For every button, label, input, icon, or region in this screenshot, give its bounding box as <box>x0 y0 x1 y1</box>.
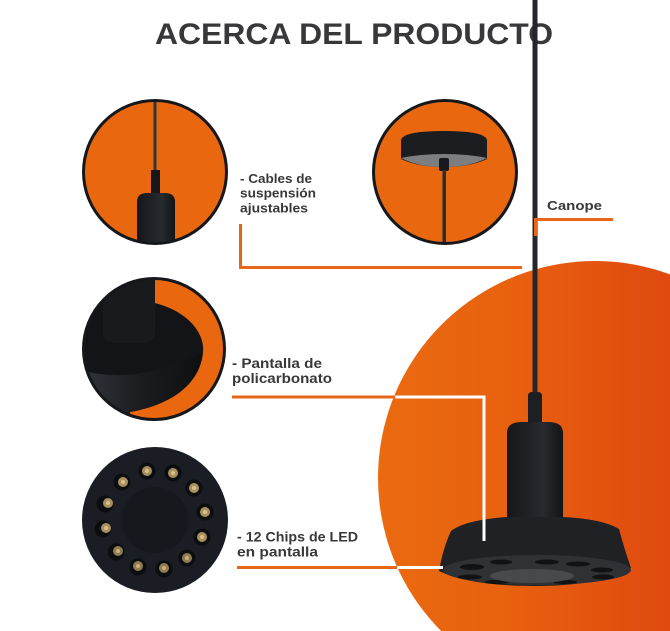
label: suspension cables: suspensión <box>240 186 316 200</box>
label: polycarbonate shade: - Pantalla de <box>232 356 323 371</box>
panel: suspension cables detail <box>84 99 226 245</box>
lamp underside with LED holes <box>443 555 631 585</box>
canopy fitting <box>439 158 449 171</box>
title: ACERCA DEL PRODUCTO <box>155 18 553 51</box>
lamp cylinder body <box>507 422 563 520</box>
large orange background circle <box>378 261 670 631</box>
label: LED chips: en pantalla <box>237 544 319 560</box>
label: LED chips: - 12 Chips de LED <box>237 530 358 544</box>
panel: canopy detail <box>374 100 516 245</box>
leader line: LED chips, white part <box>397 566 443 569</box>
leader line: polycarbonate shade, orange part <box>232 396 395 398</box>
lamp shade <box>439 517 631 586</box>
label: suspension cables: - Cables de <box>240 172 312 186</box>
leader line: polycarbonate shade, white part <box>395 397 484 541</box>
panel: polycarbonate shade detail <box>82 277 226 421</box>
cable neck <box>151 170 160 195</box>
label: polycarbonate shade: policarbonato <box>232 371 332 386</box>
leader line: canope <box>536 220 613 236</box>
label: polycarbonate shade <box>232 356 332 386</box>
cord <box>442 170 446 245</box>
lamp cord <box>532 0 538 394</box>
pendant lamp product <box>439 0 631 586</box>
canopy disc <box>401 131 487 167</box>
panel: LED chips detail <box>82 447 228 593</box>
canopy underside <box>401 154 487 167</box>
leader line: LED chips, orange part <box>237 566 397 569</box>
label: suspension cables <box>240 172 316 216</box>
label: suspension cables: ajustables <box>240 202 308 216</box>
lamp neck <box>528 392 542 422</box>
leader line: suspension cables <box>240 224 522 268</box>
label: canope: Canope <box>547 198 602 213</box>
lamp column <box>103 270 155 343</box>
label: LED chips <box>237 530 358 560</box>
lamp cylinder <box>137 193 175 245</box>
LED chip ring <box>94 462 214 578</box>
shade rim band <box>84 352 203 412</box>
black shade mass <box>85 302 204 414</box>
cable <box>154 99 156 171</box>
